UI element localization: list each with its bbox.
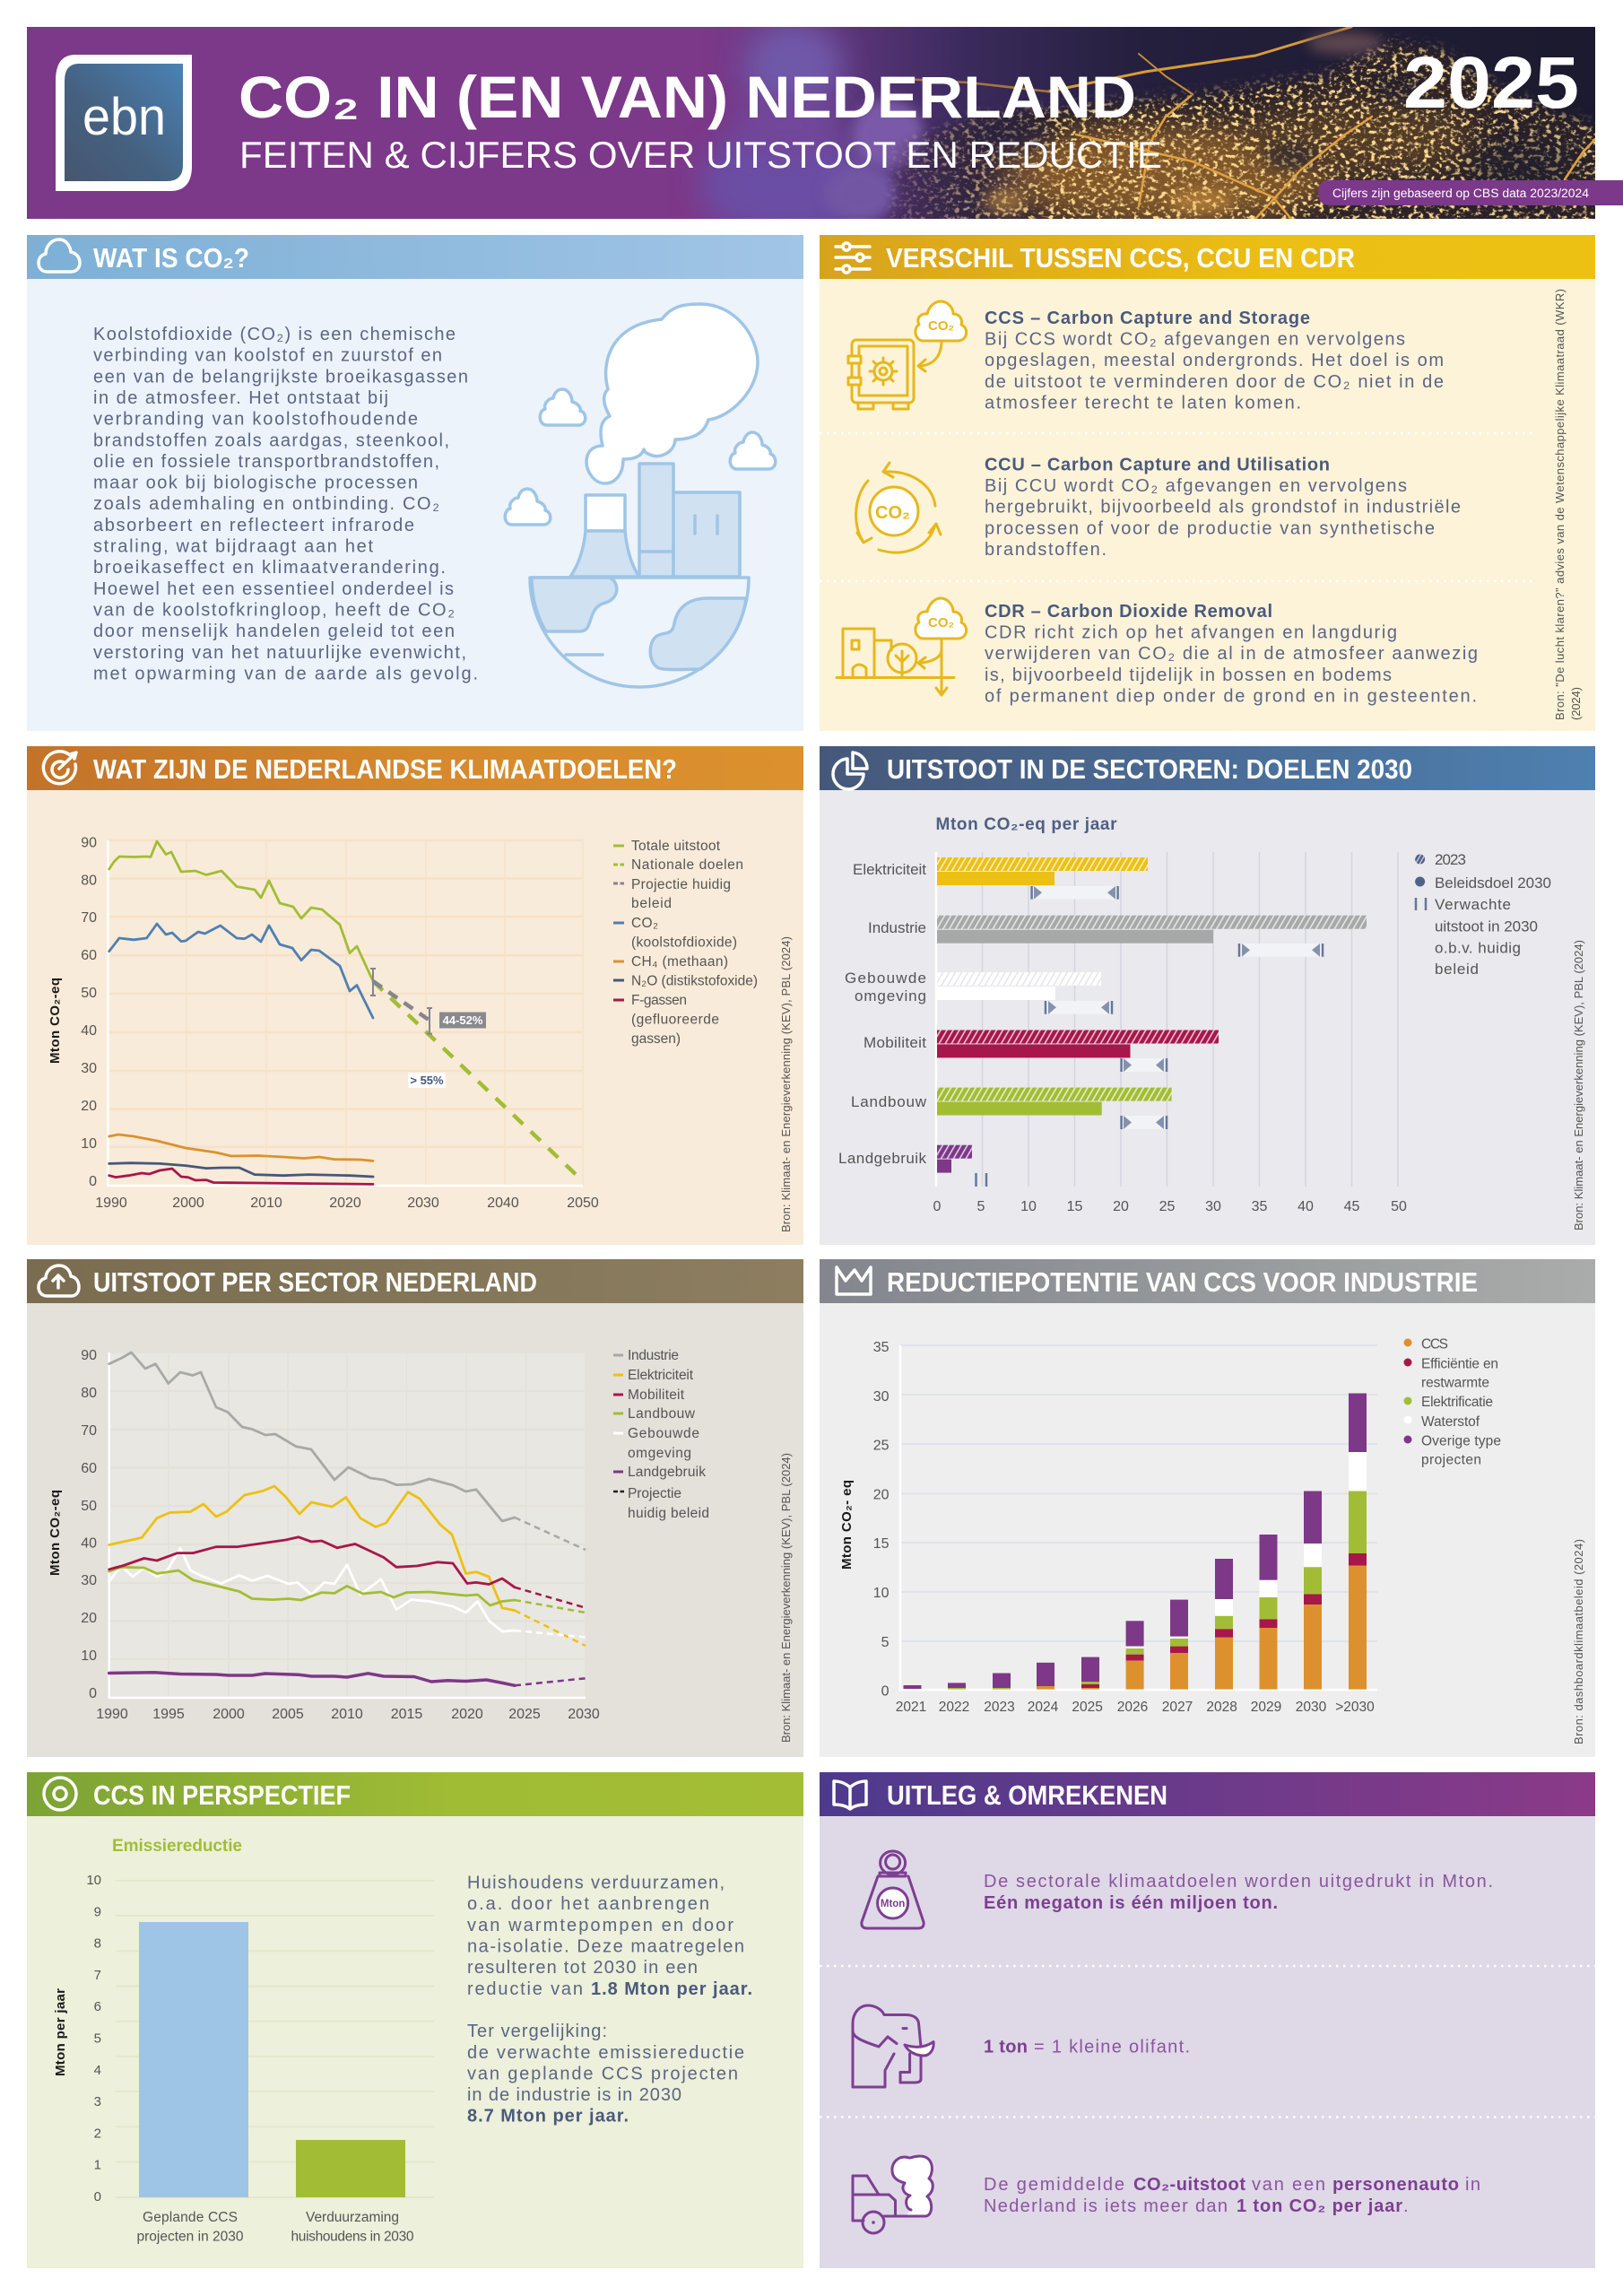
- text block: huishoudens: van warmtepompen en door: [467, 1916, 733, 1935]
- chart title: Emissiereductie: [112, 1837, 242, 1856]
- series: CO2: [109, 924, 373, 1018]
- text block: CO2 explanation: in de atmosfeer. Het ontstaat bij: [93, 388, 388, 408]
- panel: uitstoot per sector: [27, 1259, 803, 1757]
- text block: vergelijking: de verwachte emissiereductie: [467, 2043, 744, 2063]
- x axis: 2023: [984, 1700, 1015, 1715]
- legend: gassen): [631, 1031, 681, 1047]
- heading: CCS in perspectief: [27, 1772, 803, 1816]
- x axis: >2030: [1335, 1700, 1375, 1715]
- icon: book: [834, 1781, 866, 1809]
- CDR block: is, bijvoorbeeld tijdelijk in bossen en bodems: [985, 665, 1392, 685]
- x axis: [95, 1196, 599, 1211]
- row: megaton: Eén megaton is één miljoen ton.: [984, 1893, 1278, 1913]
- y axis: 2: [94, 2126, 101, 2141]
- axis title: Mton CO₂-eq: [48, 978, 63, 1064]
- legend: Gebouwde: [628, 1426, 699, 1441]
- row: personenauto: .: [1403, 2196, 1409, 2216]
- y axis: [873, 1340, 890, 1700]
- axis title: Mton CO₂-eq: [48, 1490, 63, 1576]
- text block: CO2 explanation: olie en fossiele transportbrandstoffen,: [93, 452, 439, 472]
- y axis: 70: [81, 1423, 97, 1439]
- text block: CO2 explanation: door menselijk handelen geleid tot een: [93, 622, 455, 641]
- x axis: 1995: [152, 1707, 185, 1722]
- bars: elektriciteit: [853, 857, 1148, 900]
- y axis: 60: [81, 1461, 97, 1476]
- y axis: 50: [81, 1499, 97, 1514]
- legend: Projectie huidig: [631, 877, 731, 892]
- heading: reductiepotentie: REDUCTIEPOTENTIE VAN CCS VOOR INDUSTRIE: [887, 1266, 1478, 1298]
- y axis: 30: [873, 1389, 890, 1405]
- text block: huishoudens: na-isolatie. Deze maatregelen: [467, 1937, 744, 1957]
- bars: gebouwde omgeving: omgeving: [855, 987, 926, 1004]
- line chart: uitstoot per sector: [48, 1348, 709, 1722]
- x axis: 2040: [487, 1196, 519, 1211]
- text block: CO2 explanation: broeikaseffect en klimaatverandering.: [93, 558, 446, 578]
- legend: [613, 839, 758, 1047]
- axis title: Mton CO₂- eq: [839, 1480, 855, 1570]
- text block: huishoudens: o.a. door het aanbrengen: [467, 1894, 709, 1914]
- row: olifant: 1 ton: [984, 2038, 1028, 2057]
- legend: Projectie: [628, 1486, 681, 1501]
- y axis: 1: [94, 2158, 101, 2173]
- heading: sectoren: UITSTOOT IN DE SECTOREN: DOELEN 2030: [887, 753, 1412, 785]
- bars: gebouwde omgeving: [845, 970, 1112, 1014]
- row: personenauto: Nederland is iets meer dan: [984, 2196, 1228, 2216]
- row: personenauto: 1 ton CO₂ per jaar: [1237, 2196, 1402, 2216]
- y axis: 25: [873, 1439, 890, 1454]
- projections huidig beleid: [515, 1518, 586, 1685]
- icon: cloud with arrow: [39, 1265, 79, 1296]
- row: olifant: = 1 kleine olifant.: [1034, 2038, 1190, 2057]
- text block: CO2 explanation: zoals ademhaling en ontbinding. CO₂: [93, 494, 439, 514]
- x axis: [96, 1707, 600, 1722]
- text block: huishoudens: 1.8 Mton per jaar.: [591, 1979, 752, 1999]
- heading: uitstoot per sector: [27, 1259, 803, 1303]
- x axis: 2020: [329, 1196, 361, 1211]
- y axis: 20: [81, 1611, 97, 1626]
- row: olifant: [853, 2005, 1190, 2087]
- row: personenauto: in: [1465, 2175, 1480, 2195]
- text block: CO2 explanation: [93, 325, 478, 683]
- legend: [1404, 1337, 1501, 1468]
- bars: industrie: [868, 916, 1367, 957]
- stacked bar chart: reductiepotentie: [839, 1337, 1501, 1715]
- bar labels: Geplande CCS: [143, 2210, 238, 2225]
- heading: verschil: VERSCHIL TUSSEN CCS, CCU EN CDR: [886, 242, 1355, 274]
- y axis: 5: [881, 1635, 890, 1650]
- y axis: 10: [86, 1873, 101, 1888]
- series: mobiliteit: [109, 1537, 515, 1587]
- text block: CO2 explanation: verbranding van koolstofhoudende: [93, 410, 418, 430]
- text block: vergelijking: in de industrie is in 2030: [467, 2085, 681, 2105]
- legend: (koolstofdioxide): [631, 935, 737, 951]
- heading: uitstoot per sector: UITSTOOT PER SECTOR NEDERLAND: [93, 1266, 537, 1298]
- panel: verschil CCS CCU CDR: [820, 235, 1595, 731]
- y axis: 35: [873, 1340, 890, 1355]
- x axis: 2020: [451, 1707, 483, 1722]
- series: elektriciteit: [109, 1486, 515, 1611]
- panel: klimaatdoelen: [27, 746, 803, 1245]
- legend: Verwachte: [1435, 896, 1511, 913]
- CDR block: CDR – Carbon Dioxide Removal: [985, 602, 1272, 622]
- source note: Bron: dashboardklimaatbeleid (2024): [1572, 1539, 1585, 1744]
- x axis: 15: [1067, 1199, 1083, 1214]
- x axis: 2030: [1296, 1700, 1327, 1715]
- illustration: factory on globe with clouds: [505, 304, 776, 687]
- y axis: 40: [81, 1535, 97, 1552]
- icon: target: [43, 752, 76, 784]
- bars: elektriciteit: Elektriciteit: [853, 861, 926, 878]
- icon: CO2 cycle: CO₂: [875, 503, 910, 523]
- text block: CO2 explanation: brandstoffen zoals aardgas, steenkool,: [93, 430, 449, 450]
- logo: [56, 55, 192, 191]
- CCU block: Bij CCU wordt CO₂ afgevangen en vervolgens: [985, 476, 1407, 496]
- legend: uitstoot in 2030: [1435, 918, 1538, 935]
- bar: verduurzaming: [296, 2140, 405, 2197]
- x axis: 2010: [331, 1707, 363, 1722]
- y axis: 90: [81, 1348, 97, 1363]
- legend: CO₂: [631, 916, 658, 931]
- x axis: 40: [1298, 1199, 1314, 1214]
- y axis: 15: [873, 1536, 890, 1552]
- title: CO₂ IN (EN VAN) NEDERLAND: [239, 64, 1136, 130]
- bars 2026-2028: [1126, 1559, 1233, 1690]
- text block: CO2 explanation: een van de belangrijkste broeikasgassen: [93, 367, 468, 387]
- CCS block: CCS – Carbon Capture and Storage: [985, 309, 1310, 328]
- text block: CO2 explanation: verbinding van koolstof en zuurstof en: [93, 346, 442, 366]
- text block: CO2 explanation: straling, wat bijdraagt aan het: [93, 536, 373, 556]
- legend: Elektrificatie: [1421, 1395, 1493, 1410]
- heading: wat is CO2: [27, 235, 803, 279]
- legend: [1415, 851, 1551, 978]
- axis title: Mton per jaar: [53, 1988, 68, 2076]
- text block: CO2 explanation: met opwarming van de aarde als gevolg.: [93, 664, 478, 683]
- row: personenauto: De gemiddelde: [984, 2175, 1124, 2195]
- panel: uitleg en omrekenen: [820, 1772, 1595, 2268]
- subtitle: FEITEN & CIJFERS OVER UITSTOOT EN REDUCTIE: [239, 134, 1162, 176]
- x axis: 5: [977, 1199, 985, 1214]
- series: industrie: [109, 1352, 515, 1521]
- icon: weight: Mton: [881, 1899, 905, 1909]
- legend: omgeving: [628, 1446, 691, 1461]
- y axis: 50: [81, 986, 97, 1001]
- legend: Landgebruik: [628, 1465, 706, 1480]
- y axis: 90: [81, 836, 97, 850]
- text block: huishoudens: reductie van: [467, 1979, 583, 1999]
- y axis: 20: [873, 1487, 890, 1502]
- panel: wat is CO2: [27, 235, 803, 731]
- legend: CCS: [1421, 1337, 1448, 1352]
- heading: klimaatdoelen: WAT ZIJN DE NEDERLANDSE KLIMAATDOELEN?: [93, 753, 677, 785]
- x axis: 2026: [1117, 1700, 1148, 1715]
- y axis: [81, 836, 97, 1189]
- x axis: 1990: [96, 1707, 128, 1722]
- x axis: 2050: [567, 1196, 599, 1211]
- line chart: klimaatdoelen: [48, 836, 758, 1211]
- icon: weight: [862, 1851, 924, 1928]
- CDR block: of permanent diep onder de grond en in gesteenten.: [985, 687, 1477, 707]
- series: nationale doelen: [373, 981, 582, 1180]
- y axis: 10: [81, 1136, 97, 1152]
- CCU block: [856, 456, 1461, 560]
- CCU block: hergebruikt, bijvoorbeeld als grondstof in industriële: [985, 498, 1461, 517]
- heading: klimaatdoelen: [27, 746, 803, 790]
- bar chart: sectoren: [838, 851, 1551, 1214]
- x axis: 45: [1344, 1199, 1359, 1214]
- y axis: 30: [81, 1573, 97, 1588]
- bars: landbouw: Landbouw: [851, 1093, 927, 1110]
- x axis: 2000: [172, 1196, 204, 1211]
- icon: cloud: [39, 239, 80, 272]
- y axis: 0: [89, 1174, 97, 1189]
- x axis: 2015: [391, 1707, 422, 1722]
- icon: building, tree and CO2 cloud: CO₂: [928, 615, 954, 631]
- data note pill: Cijfers zijn gebaseerd op CBS data 2023/2024: [1332, 187, 1589, 200]
- y axis: 70: [81, 910, 97, 926]
- icon: elephant: [853, 2005, 933, 2087]
- panel: reductiepotentie: [820, 1259, 1595, 1757]
- CCS block: atmosfeer terecht te laten komen.: [985, 393, 1301, 413]
- x axis: [896, 1700, 1375, 1715]
- label >55%: > 55%: [410, 1074, 444, 1087]
- legend: Waterstof: [1421, 1414, 1480, 1430]
- x axis: 2030: [568, 1707, 600, 1722]
- legend: Beleidsdoel 2030: [1435, 874, 1551, 891]
- banner background photo: [27, 27, 1595, 219]
- legend: 2023: [1435, 851, 1466, 868]
- x axis: 2027: [1162, 1700, 1193, 1715]
- row: personenauto: personenauto: [1332, 2175, 1459, 2195]
- row: personenauto: CO₂-uitstoot: [1133, 2175, 1245, 2195]
- x axis: 35: [1252, 1199, 1268, 1214]
- CCU block: CCU – Carbon Capture and Utilisation: [985, 456, 1330, 475]
- CCS block: de uitstoot te verminderen door de CO₂ niet in de: [985, 372, 1444, 392]
- source note: Bron: "De lucht klaren?" advies van de Wetenschappelijke Klimaatraad (WKR): [1553, 289, 1567, 720]
- row: megaton: [862, 1851, 1493, 1928]
- legend: Mobiliteit: [628, 1387, 685, 1403]
- CDR block: verwijderen van CO₂ die al in de atmosfeer aanwezig: [985, 644, 1478, 664]
- source note: (2024): [1569, 687, 1583, 720]
- text block: huishoudens: resulteren tot 2030 in een: [467, 1958, 698, 1978]
- y axis: 80: [81, 1386, 97, 1401]
- y axis: 0: [94, 2189, 101, 2205]
- y axis: 80: [81, 874, 97, 888]
- bars: gebouwde omgeving: Gebouwde: [845, 970, 926, 987]
- x axis: 25: [1159, 1199, 1175, 1214]
- bar labels: projecten in 2030: [136, 2230, 244, 2245]
- x axis: 2022: [939, 1700, 969, 1715]
- source note: Bron: Klimaat- en Energieverkenning (KEV), PBL (2024): [779, 1453, 793, 1743]
- icon: sliders: [836, 243, 870, 273]
- heading: reductiepotentie: [820, 1259, 1595, 1303]
- year: 2025: [1403, 42, 1579, 124]
- x axis: 10: [1020, 1199, 1037, 1214]
- bars 2021-2025: [904, 1657, 1099, 1690]
- y axis: 0: [89, 1686, 97, 1701]
- x axis: [933, 1199, 1407, 1214]
- legend: CH₄ (methaan): [631, 954, 728, 970]
- text block: vergelijking: Ter vergelijking:: [467, 2022, 607, 2041]
- heading: CCS in perspectief: CCS IN PERSPECTIEF: [93, 1779, 351, 1811]
- legend: projecten: [1421, 1453, 1481, 1468]
- row: personenauto: van een: [1252, 2175, 1325, 2195]
- x axis: 0: [933, 1199, 942, 1214]
- heading: verschil: [820, 235, 1595, 279]
- y axis: 40: [81, 1023, 97, 1039]
- panel: CCS in perspectief: [27, 1772, 803, 2268]
- y axis: 5: [94, 2031, 101, 2047]
- y axis: [81, 1348, 97, 1701]
- bars: landgebruik: [838, 1145, 986, 1187]
- y axis: 0: [881, 1684, 890, 1700]
- text block: huishoudens: Huishoudens verduurzamen,: [467, 1873, 725, 1892]
- y axis: 10: [81, 1648, 97, 1664]
- bars: landbouw: [851, 1088, 1172, 1129]
- bars: industrie: Industrie: [868, 919, 926, 936]
- y axis: 9: [94, 1904, 101, 1919]
- y axis: 20: [81, 1099, 97, 1114]
- legend: restwarmte: [1421, 1376, 1489, 1390]
- x axis: 2005: [272, 1707, 304, 1722]
- y axis: 10: [873, 1586, 890, 1601]
- CCS block: [848, 301, 1444, 413]
- x axis: 2025: [1072, 1700, 1103, 1715]
- data note pill: [1318, 180, 1623, 205]
- CDR block: CDR richt zich op het afvangen en langdurig: [985, 622, 1397, 642]
- legend: Landbouw: [628, 1406, 696, 1422]
- CCU block: brandstoffen.: [985, 540, 1107, 560]
- text block: CO2 explanation: Hoewel het een essentieel onderdeel is: [93, 579, 454, 599]
- icon: safe with CO2 cloud: [848, 301, 967, 409]
- text block: CO2 explanation: verstoring van het natuurlijke evenwicht,: [93, 643, 466, 663]
- legend: Elektriciteit: [628, 1368, 694, 1383]
- label 44-52%: 44-52%: [443, 1013, 483, 1027]
- legend: huidig beleid: [628, 1506, 709, 1521]
- bars: mobiliteit: Mobiliteit: [864, 1034, 926, 1051]
- series: F-gassen: [109, 1169, 373, 1184]
- source note: Bron: Klimaat- en Energieverkenning (KEV), PBL (2024): [779, 936, 793, 1232]
- x axis: 2025: [508, 1707, 541, 1722]
- legend: Efficiëntie en: [1421, 1356, 1498, 1372]
- bar labels: Verduurzaming: [306, 2210, 399, 2225]
- legend: Totale uitstoot: [631, 839, 721, 854]
- logo: ebn: [82, 88, 166, 146]
- bar: geplande CCS: [139, 1922, 248, 2197]
- bars: mobiliteit: [864, 1030, 1219, 1072]
- x axis: 1990: [95, 1196, 127, 1211]
- legend: beleid: [1435, 961, 1479, 978]
- bars 2029-later: [1259, 1394, 1367, 1690]
- y axis: 30: [81, 1061, 97, 1076]
- y axis: 4: [94, 2063, 101, 2078]
- series: CH4: [109, 1135, 373, 1161]
- text block: vergelijking: [467, 2022, 744, 2126]
- text block: CO2 explanation: absorbeert en reflecteert infrarode: [93, 516, 414, 535]
- source note: Bron: Klimaat- en Energieverkenning (KEV), PBL (2024): [1572, 940, 1585, 1231]
- icon: eye: [44, 1778, 76, 1810]
- header banner: [27, 27, 1623, 219]
- x axis: 2028: [1206, 1700, 1237, 1715]
- chart subtitle: Mton CO₂-eq per jaar: [936, 815, 1117, 834]
- x axis: 50: [1391, 1199, 1407, 1214]
- error bars: [370, 969, 432, 1034]
- text block: CO2 explanation: Koolstofdioxide (CO₂) is een chemische: [93, 325, 456, 344]
- bar labels: huishoudens in 2030: [291, 2230, 414, 2245]
- y axis: 3: [94, 2094, 101, 2109]
- y axis: 6: [94, 1999, 101, 2014]
- legend: Overige type: [1421, 1434, 1501, 1449]
- y axis: 8: [94, 1936, 101, 1952]
- bar labels: [136, 2210, 414, 2245]
- CCS block: opgeslagen, meestal ondergronds. Het doel is om: [985, 351, 1444, 370]
- legend: [613, 1348, 709, 1521]
- legend: F-gassen: [631, 993, 687, 1008]
- icon: factory line chart: [837, 1267, 871, 1294]
- CDR block: [837, 598, 1478, 707]
- bar chart: emissiereductie: [53, 1873, 434, 2245]
- icon: CO2 cycle: [856, 463, 941, 552]
- x axis: 2000: [213, 1707, 245, 1722]
- series: landgebruik: [109, 1673, 515, 1685]
- x axis: 30: [1205, 1199, 1221, 1214]
- heading: wat is CO2: WAT IS CO₂?: [93, 242, 249, 274]
- heading: uitleg: UITLEG & OMREKENEN: [887, 1779, 1167, 1811]
- x axis: 2029: [1251, 1700, 1281, 1715]
- row: personenauto: [853, 2156, 1480, 2233]
- series: gebouwde omgeving: [109, 1548, 515, 1631]
- x axis: 20: [1113, 1199, 1129, 1214]
- x axis: 2030: [407, 1196, 439, 1211]
- y axis: 7: [94, 1968, 101, 1983]
- x axis: 2010: [250, 1196, 282, 1211]
- text block: CO2 explanation: maar ook bij biologische processen: [93, 474, 418, 493]
- text block: vergelijking: van geplande CCS projecten: [467, 2065, 738, 2084]
- text block: CO2 explanation: van de koolstofkringloop, heeft de CO₂: [93, 601, 455, 621]
- x axis: 2024: [1028, 1700, 1059, 1715]
- legend: o.b.v. huidig: [1435, 940, 1521, 957]
- y axis: [86, 1873, 101, 2205]
- icon: car with exhaust: [853, 2156, 933, 2233]
- text block: huishoudens: [467, 1873, 752, 1999]
- series: landbouw: [109, 1567, 515, 1605]
- series: totale uitstoot: [109, 841, 373, 981]
- icon: pie chart: [833, 752, 867, 789]
- y axis: 60: [81, 948, 97, 963]
- source note: [1553, 289, 1583, 720]
- row: megaton: De sectorale klimaatdoelen worden uitgedrukt in Mton.: [984, 1872, 1493, 1892]
- legend: (gefluoreerde: [631, 1012, 719, 1028]
- icon: safe with CO2 cloud: CO₂: [928, 318, 954, 334]
- CCS block: Bij CCS wordt CO₂ afgevangen en vervolgens: [985, 330, 1405, 350]
- text block: vergelijking: 8.7 Mton per jaar.: [467, 2107, 629, 2126]
- legend: beleid: [631, 896, 672, 911]
- series: projectie huidig beleid: [373, 981, 429, 1020]
- series: N2O: [109, 1163, 373, 1177]
- CCU block: processen of voor de productie van synthetische: [985, 518, 1435, 538]
- x axis: 2021: [896, 1700, 926, 1715]
- legend: Nationale doelen: [631, 857, 743, 873]
- panel: uitstoot in de sectoren: [820, 746, 1595, 1245]
- icon: building, tree and CO2 cloud: [837, 598, 967, 695]
- bars: landgebruik: Landgebruik: [838, 1150, 927, 1167]
- heading: uitleg: [820, 1772, 1595, 1816]
- legend: Industrie: [628, 1348, 679, 1363]
- heading: sectoren: [820, 746, 1595, 790]
- legend: N₂O (distikstofoxide): [631, 974, 758, 988]
